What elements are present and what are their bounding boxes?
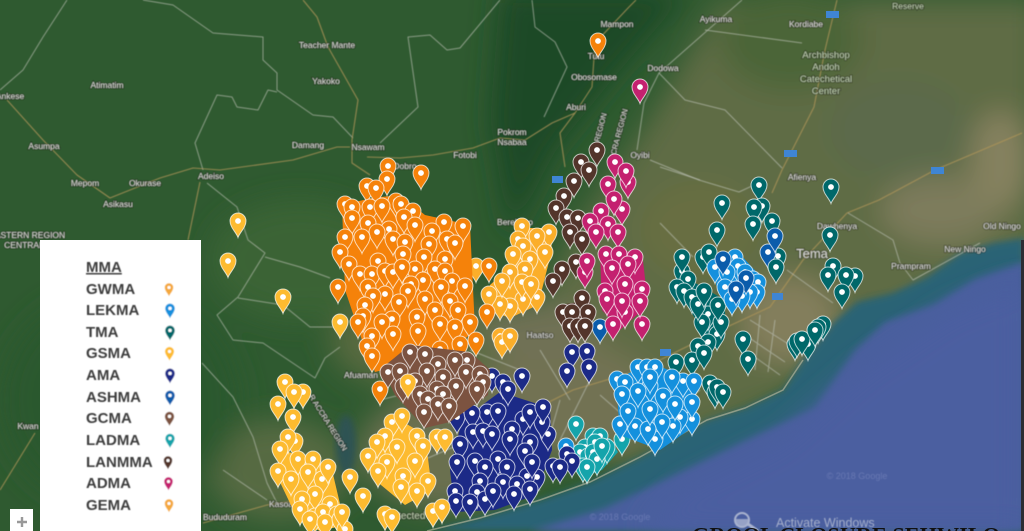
legend row ASHMA: ASHMA bbox=[86, 389, 141, 406]
place name labels: Nsabaa bbox=[497, 137, 527, 147]
place name labels: REGION bbox=[592, 112, 609, 143]
teal pin over blue bbox=[768, 259, 784, 284]
place name labels: CENTRAL bbox=[4, 240, 44, 250]
place name labels: Mampon bbox=[600, 19, 634, 29]
place name labels: Obosomase bbox=[571, 72, 617, 82]
place name labels: Tutu bbox=[588, 51, 605, 61]
sea bbox=[427, 238, 1024, 531]
legend row AMA bbox=[86, 367, 175, 384]
legend row LEKMA bbox=[86, 302, 175, 319]
legend row ADMA: ADMA bbox=[86, 475, 131, 492]
pins: GCMA orange bbox=[330, 33, 606, 406]
pins: AMA bbox=[447, 343, 597, 518]
pins: LADMA bbox=[568, 416, 630, 484]
place name labels: Tema bbox=[796, 246, 829, 261]
legend row LADMA bbox=[86, 432, 175, 449]
legend row LEKMA: LEKMA bbox=[86, 302, 139, 319]
legend row ADMA bbox=[86, 475, 173, 492]
place name labels: Kasoa bbox=[269, 499, 293, 509]
place name labels: Adeiso bbox=[198, 171, 224, 181]
place name labels: Andoh bbox=[812, 62, 840, 73]
place name labels: Dobro bbox=[393, 161, 417, 171]
place name labels: Catechetical bbox=[800, 74, 852, 85]
watermarks: Activate Windows bbox=[776, 516, 875, 530]
legend row GSMA bbox=[86, 345, 174, 362]
legend row ASHMA bbox=[86, 389, 175, 406]
place name labels: New Ningo bbox=[944, 244, 986, 254]
pins: GSMA and GEMA bbox=[220, 213, 453, 531]
place name labels: Reserve bbox=[892, 1, 924, 11]
legend row AMA: AMA bbox=[86, 367, 120, 384]
pins: GCMA brown bbox=[380, 344, 491, 428]
zoom control bbox=[10, 509, 33, 531]
pins: ADMA bbox=[577, 79, 650, 340]
legend row GCMA: GCMA bbox=[86, 410, 132, 427]
legend row GEMA bbox=[86, 497, 173, 514]
place name labels: Nsawam bbox=[351, 142, 385, 152]
place name labels: Protected bbox=[383, 511, 425, 522]
place name labels: Damang bbox=[292, 140, 324, 150]
place name labels: Old Ningo bbox=[983, 221, 1021, 231]
legend row GWMA: GWMA bbox=[86, 281, 135, 298]
pins: TMA bbox=[668, 177, 863, 408]
legend row GSMA: GSMA bbox=[86, 345, 131, 362]
pins: LEKMA bbox=[558, 249, 766, 462]
place name labels: Teacher Mante bbox=[299, 40, 355, 50]
place name labels: Dawhenya bbox=[817, 221, 857, 231]
place name labels: Okurase bbox=[129, 178, 161, 188]
place name labels: Center bbox=[812, 86, 840, 97]
place name labels: Oyibi bbox=[630, 150, 650, 160]
place name labels: Haatso bbox=[527, 330, 554, 340]
place name labels: R ACCRA REGION bbox=[307, 393, 349, 452]
place name labels: Afienya bbox=[788, 172, 816, 182]
legend row TMA bbox=[86, 324, 175, 341]
legend heading: MMA bbox=[86, 259, 122, 276]
pins: LANMMA bbox=[545, 142, 605, 342]
pins: ASHMA bbox=[592, 228, 783, 344]
place name labels: Berekuso bbox=[497, 217, 533, 227]
place name labels: Dodowa bbox=[647, 63, 679, 73]
place name labels: Kotoku bbox=[359, 249, 386, 259]
legend row LADMA: LADMA bbox=[86, 432, 140, 449]
pin: GSMA over brown bbox=[400, 374, 416, 398]
legend row LANMMA: LANMMA bbox=[86, 454, 153, 471]
place name labels: Yakoko bbox=[312, 76, 340, 86]
place name labels: Ayikuma bbox=[700, 14, 732, 24]
watermarks: © 2018 Google bbox=[590, 512, 650, 522]
place name labels: Fotobi bbox=[453, 150, 477, 160]
lake bbox=[336, 415, 356, 475]
place name labels: Asumpa bbox=[28, 141, 60, 151]
legend panel bbox=[40, 240, 201, 531]
legend row TMA: TMA bbox=[86, 324, 119, 341]
place name labels: Kordiabe bbox=[789, 19, 823, 29]
pins: GWMA bbox=[468, 218, 557, 358]
legend row GEMA: GEMA bbox=[86, 497, 131, 514]
place name labels: Afuaman bbox=[344, 370, 378, 380]
watermarks bbox=[590, 471, 887, 531]
place name labels: CCRA REGION bbox=[607, 108, 630, 161]
legend row GWMA bbox=[86, 281, 173, 298]
place name labels: Aburi bbox=[566, 102, 586, 112]
watermarks: © 2018 Google bbox=[827, 471, 887, 481]
place name labels: Asikasu bbox=[103, 199, 133, 209]
place name labels: Mepom bbox=[71, 178, 99, 188]
place name labels: Prampram bbox=[891, 261, 931, 271]
dark image edge bbox=[1021, 240, 1024, 531]
road shields bbox=[383, 11, 944, 486]
place name labels: Archbishop bbox=[802, 50, 850, 61]
legend row GCMA bbox=[86, 410, 174, 427]
place name labels: Pokrom bbox=[497, 127, 527, 137]
place name labels: Kwan bbox=[17, 421, 39, 431]
place name labels: Atimatim bbox=[90, 80, 124, 90]
place name labels: Bududuram bbox=[203, 512, 247, 522]
